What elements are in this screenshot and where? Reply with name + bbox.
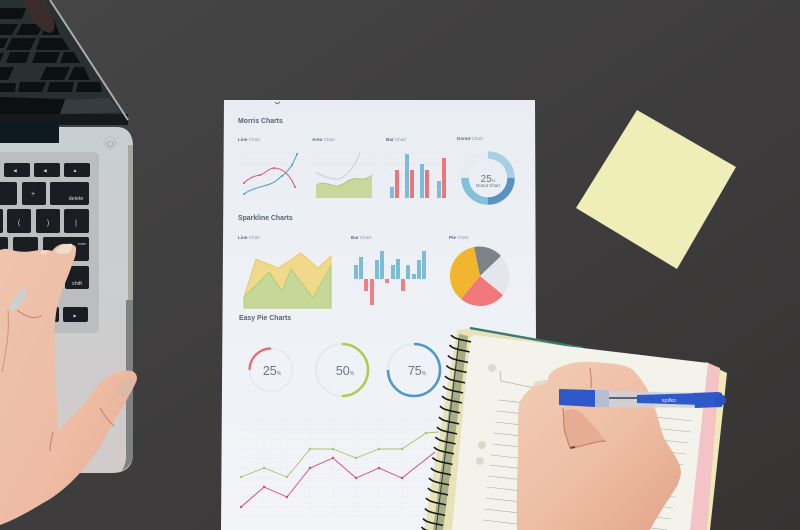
key labels: shift bbox=[72, 281, 82, 287]
easy pie 50%: 50% bbox=[336, 364, 355, 378]
easy pie 75%: 75% bbox=[408, 364, 427, 378]
area chart bbox=[312, 137, 373, 198]
key labels: ( bbox=[18, 220, 21, 227]
laptop bbox=[0, 0, 133, 473]
heading: Morris Charts: Morris Charts bbox=[238, 118, 283, 125]
keyboard keys bbox=[0, 163, 90, 322]
sparkline pie chart: Pie Chart bbox=[449, 235, 469, 240]
bar chart bbox=[386, 137, 447, 198]
sticky note bbox=[576, 110, 736, 269]
punch holes bbox=[476, 364, 496, 465]
ruled lines bbox=[483, 400, 692, 530]
binding strip bbox=[424, 328, 583, 530]
easy pie 25%: 25% bbox=[263, 364, 282, 378]
area chart: Area Chart bbox=[312, 137, 335, 142]
key labels: ◀ bbox=[43, 168, 47, 173]
blue pen bbox=[559, 389, 726, 408]
hinge bbox=[0, 122, 59, 143]
fingernails bbox=[55, 244, 72, 254]
key labels: | bbox=[75, 220, 77, 227]
key labels: ) bbox=[47, 220, 49, 227]
line chart bbox=[238, 137, 298, 198]
sparkline bar chart bbox=[351, 235, 426, 305]
key labels bbox=[13, 168, 87, 318]
key labels: ◀ bbox=[13, 168, 17, 173]
white page bbox=[452, 335, 708, 530]
key well bbox=[0, 152, 99, 333]
donut chart: Donut Chart bbox=[476, 183, 501, 188]
easy pie 50% bbox=[316, 344, 368, 396]
laptop body bbox=[0, 127, 133, 473]
line chart: Line Chart bbox=[238, 137, 261, 142]
sparkline pie chart bbox=[449, 235, 509, 306]
spiral coils bbox=[422, 335, 471, 530]
key labels: ▶ bbox=[73, 313, 77, 318]
easy pie 25% bbox=[250, 348, 292, 392]
back cover and page layers bbox=[690, 366, 727, 530]
key labels: delete bbox=[69, 196, 83, 202]
heading: Easy Pie Charts: Easy Pie Charts bbox=[239, 315, 291, 322]
bar chart: Bar Chart bbox=[386, 137, 407, 142]
paper report bbox=[221, 100, 536, 530]
laptop screen bbox=[0, 0, 128, 127]
heading: Sparkline Charts: Sparkline Charts bbox=[238, 215, 293, 222]
notebook bbox=[422, 328, 727, 530]
sparkline line chart: Line Chart bbox=[238, 235, 261, 240]
key labels: ▲ bbox=[73, 168, 77, 174]
power button bbox=[104, 137, 116, 149]
blue pen: spitko bbox=[662, 398, 676, 404]
knuckle creases bbox=[17, 310, 114, 451]
key labels: enter bbox=[78, 242, 87, 246]
left hand bbox=[0, 244, 137, 525]
sparkline bar chart: Bar Chart bbox=[351, 235, 372, 240]
donut chart: Donut Chart bbox=[457, 136, 483, 141]
curled fingers bbox=[533, 368, 606, 448]
gap between fingers bbox=[8, 283, 27, 310]
right hand bbox=[517, 362, 681, 530]
easy pie 75% bbox=[388, 344, 440, 396]
sparkline line chart bbox=[238, 235, 331, 308]
donut chart bbox=[457, 136, 511, 201]
donut chart: 25% bbox=[481, 174, 496, 185]
bottom line chart bbox=[240, 420, 450, 516]
key labels: + bbox=[31, 191, 35, 198]
